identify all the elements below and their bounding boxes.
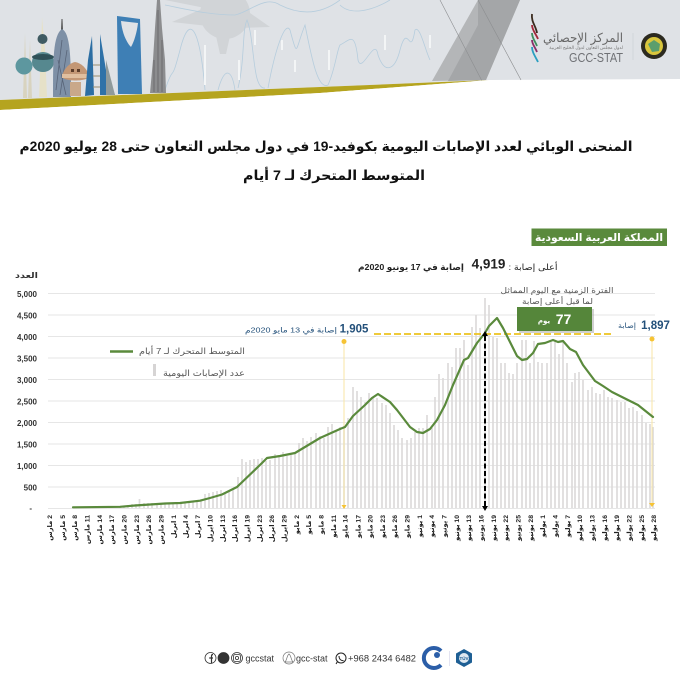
y-axis labels: 5,000 bbox=[17, 290, 38, 299]
x-axis date labels: 22 يونيو bbox=[503, 515, 510, 542]
x-axis date labels: 17 مايو bbox=[356, 515, 362, 539]
handle gcc-stat: gcc-stat bbox=[296, 654, 328, 664]
x-axis date labels: 8 مارس bbox=[72, 515, 79, 541]
x-axis date labels: 29 مايو bbox=[404, 515, 412, 539]
right callout bbox=[618, 320, 670, 332]
x-axis date labels: 16 يونيو bbox=[478, 515, 486, 542]
Kingdom Centre bbox=[117, 16, 142, 94]
y-axis labels: 2,000 bbox=[17, 419, 38, 428]
x-axis date labels bbox=[47, 515, 658, 545]
y-axis labels: 2,500 bbox=[17, 398, 38, 406]
logo arabic name: المركز الإحصائي bbox=[543, 31, 623, 46]
x-axis date labels: 19 يوليو bbox=[614, 515, 621, 542]
x-axis date labels: 11 مارس bbox=[84, 515, 92, 544]
Kuwait towers bbox=[16, 17, 54, 98]
peak summary bbox=[358, 256, 558, 273]
right unit: إصابة bbox=[618, 323, 636, 330]
y-axis labels: 4,500 bbox=[17, 312, 38, 320]
period box bbox=[517, 307, 594, 333]
x-axis date labels: 25 يوليو bbox=[639, 515, 646, 542]
y-axis labels bbox=[17, 290, 38, 513]
chart gridlines bbox=[48, 294, 655, 508]
GCC emblem bbox=[641, 33, 667, 59]
x-axis date labels: 4 ابريل bbox=[183, 515, 190, 538]
right value: 1,897 bbox=[641, 320, 670, 332]
x-axis date labels: 10 يونيو bbox=[454, 515, 461, 542]
y-axis labels: 3,000 bbox=[17, 376, 38, 385]
legend daily label: عدد الإصابات اليومية bbox=[163, 368, 245, 379]
logo wing bbox=[532, 14, 538, 62]
x-axis date labels: 14 مارس bbox=[97, 515, 104, 545]
x-axis date labels: 23 مارس bbox=[134, 515, 141, 545]
social icons bbox=[205, 652, 242, 664]
x-axis date labels: 13 ابريل bbox=[220, 515, 227, 542]
left date: إصابة في 13 مايو 2020م bbox=[245, 326, 337, 334]
x-axis date labels: 28 يوليو bbox=[651, 515, 658, 542]
x-axis date labels: 5 مارس bbox=[60, 515, 67, 541]
x-axis date labels: 10 يوليو bbox=[577, 515, 584, 542]
period unit: يوم bbox=[538, 318, 550, 325]
x-axis date labels: 8 مايو bbox=[318, 515, 326, 535]
black dashed arrow bbox=[482, 331, 488, 511]
x-axis date labels: 19 ابريل bbox=[244, 515, 252, 542]
logo arabic subtitle: لدول مجلس التعاون لدول الخليج العربية bbox=[549, 45, 623, 50]
x-axis date labels: 16 يوليو bbox=[602, 515, 609, 542]
x-axis date labels: 2 مارس bbox=[47, 515, 54, 541]
x-axis date labels: 19 يونيو bbox=[491, 515, 498, 542]
left callout bbox=[245, 324, 369, 336]
left reference marker bbox=[342, 339, 346, 509]
y-axis title: العدد bbox=[15, 271, 38, 280]
x-axis date labels: 11 مايو bbox=[331, 515, 338, 539]
x-axis date labels: 16 ابريل bbox=[232, 515, 239, 542]
yellow dashed level line bbox=[374, 333, 613, 335]
daily cases bars bbox=[112, 298, 653, 508]
x-axis date labels: 25 يونيو bbox=[516, 515, 522, 542]
period note bbox=[500, 286, 614, 307]
period value: 77 bbox=[556, 311, 571, 327]
x-axis date labels: 20 مارس bbox=[122, 515, 128, 545]
whatsapp icon bbox=[336, 653, 346, 664]
x-axis date labels: 29 مارس bbox=[158, 515, 166, 545]
x-axis date labels: 22 يوليو bbox=[626, 515, 634, 542]
x-axis date labels: 4 يونيو bbox=[429, 515, 436, 538]
x-axis date labels: 29 ابريل bbox=[282, 515, 288, 542]
x-axis date labels: 1 يوليو bbox=[540, 515, 547, 538]
note line 2: لما قبل أعلى إصابة bbox=[522, 296, 593, 307]
x-axis date labels: 5 مايو bbox=[306, 515, 313, 535]
snapchat icon bbox=[283, 652, 295, 664]
x-axis date labels: 17 مارس bbox=[109, 515, 116, 545]
y-axis labels: - bbox=[29, 504, 32, 513]
Al Hamra tower bbox=[53, 19, 71, 97]
domed tower bbox=[62, 62, 89, 96]
x-axis date labels: 10 ابريل bbox=[208, 515, 214, 542]
GCC-STAT logo bbox=[532, 14, 667, 65]
legend moving average label: المتوسط المتحرك لـ 7 أيام bbox=[139, 345, 245, 356]
y-axis labels: 500 bbox=[24, 484, 38, 492]
y-axis labels: 3,500 bbox=[17, 354, 38, 364]
x-axis date labels: 26 مارس bbox=[146, 515, 153, 545]
title line 1: المنحنى الوبائي لعدد الإصابات اليومية بكوفيد-19 في دول مجلس التعاون حتى 28 يوليو 2020م bbox=[20, 139, 633, 155]
peak value: 4,919 bbox=[472, 256, 505, 272]
peak label: أعلى إصابة : bbox=[508, 261, 558, 273]
x-axis date labels: 13 يونيو bbox=[466, 515, 473, 542]
phone number: +968 2434 6482 bbox=[348, 654, 416, 664]
Bahrain WTC bbox=[85, 34, 115, 96]
TUV badge bbox=[456, 649, 472, 667]
x-axis date labels: 26 ابريل bbox=[269, 515, 276, 542]
moving average line bbox=[73, 318, 653, 507]
Burj Khalifa bbox=[150, 0, 166, 93]
x-axis date labels: 13 يوليو bbox=[590, 515, 596, 542]
y-axis labels: 1,500 bbox=[17, 440, 38, 450]
x-axis date labels: 28 يونيو bbox=[528, 515, 535, 542]
peak date: إصابة في 17 يونيو 2020م bbox=[358, 262, 464, 273]
x-axis date labels: 2 مايو bbox=[294, 515, 301, 535]
title bbox=[20, 139, 633, 184]
faint curve decoration bbox=[165, 0, 430, 90]
x-axis date labels: 7 يوليو bbox=[565, 515, 572, 538]
grey diagonal bands bbox=[432, 0, 521, 81]
y-axis labels: 1,000 bbox=[17, 462, 38, 471]
note line 1: الفترة الزمنية مع اليوم المماثل bbox=[500, 286, 614, 295]
right reference marker bbox=[649, 336, 655, 507]
legend daily swatch bbox=[153, 364, 156, 376]
x-axis date labels: 4 يوليو bbox=[552, 515, 560, 538]
logo english name: GCC-STAT bbox=[569, 51, 623, 65]
x-axis date labels: 23 مايو bbox=[380, 515, 387, 539]
TUV badge: TÜV bbox=[460, 655, 468, 661]
y-axis labels: 4,000 bbox=[17, 333, 38, 342]
x-axis date labels: 7 يونيو bbox=[442, 515, 448, 538]
left value: 1,905 bbox=[340, 324, 369, 336]
title line 2: المتوسط المتحرك لـ 7 أيام bbox=[243, 167, 425, 184]
skyline illustration bbox=[16, 0, 166, 98]
x-axis date labels: 7 ابريل bbox=[195, 515, 202, 538]
x-axis date labels: 26 مايو bbox=[392, 515, 399, 539]
country label bbox=[532, 228, 667, 246]
x-axis date labels: 14 مايو bbox=[342, 515, 350, 539]
virus watermark bbox=[165, 0, 270, 54]
x-axis date labels: 1 ابريل bbox=[171, 515, 178, 538]
white highlights bbox=[205, 30, 430, 85]
certification logo C bbox=[424, 648, 441, 668]
legend bbox=[110, 345, 245, 379]
handle gccstat: gccstat bbox=[246, 654, 275, 664]
country label: المملكة العربية السعودية bbox=[535, 232, 663, 244]
gold stripe bbox=[0, 80, 490, 110]
x-axis date labels: 23 ابريل bbox=[257, 515, 264, 542]
footer contact bar bbox=[205, 648, 472, 668]
header banner bbox=[0, 0, 680, 113]
x-axis date labels: 20 مايو bbox=[368, 515, 374, 539]
x-axis date labels: 1 يونيو bbox=[417, 515, 424, 538]
legend moving average swatch bbox=[110, 350, 133, 353]
